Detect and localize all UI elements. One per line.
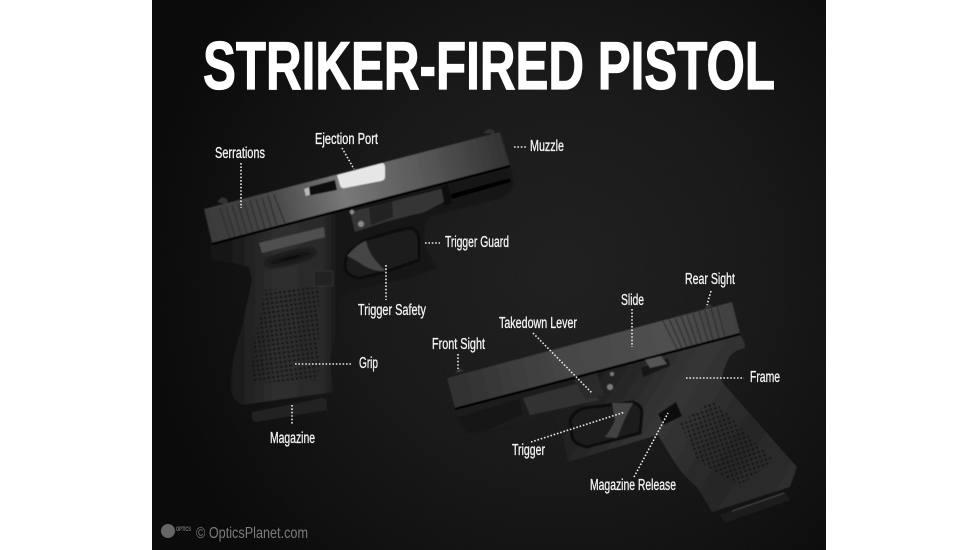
dust cover highlight (350, 188, 447, 232)
label: Trigger Guard: Trigger Guard (445, 234, 509, 251)
copyright text: © OpticsPlanet.com (196, 525, 308, 542)
guard opening (570, 402, 642, 447)
recoil spring shadow (441, 185, 452, 206)
label: Slide (621, 292, 644, 347)
label: Trigger Safety (358, 265, 426, 319)
logo wordmark: OPTICS (176, 527, 191, 533)
front sight (483, 129, 495, 134)
magazine catch (314, 271, 333, 286)
title: STRIKER-FIRED PISTOL (203, 28, 775, 104)
label: Magazine Release: Magazine Release (590, 477, 676, 494)
rail slots (451, 178, 511, 199)
slide lower edge (212, 166, 510, 244)
slide (204, 132, 510, 243)
magazine highlight (732, 493, 784, 511)
pistol: lower, facing left (447, 302, 797, 523)
footer: logo and copyright (161, 524, 308, 542)
frame light panel (259, 227, 325, 253)
label: Serrations: Serrations (215, 145, 265, 162)
label: Ejection Port: Ejection Port (315, 131, 378, 148)
slide stop tab (645, 356, 667, 368)
label: Takedown Lever (499, 315, 592, 393)
trigger (605, 403, 633, 438)
rail section (457, 399, 523, 433)
label: Serrations (215, 145, 265, 208)
slide stop lever (641, 358, 670, 377)
ejection port (337, 163, 385, 188)
trigger guard opening (345, 228, 419, 278)
label: Grip (295, 355, 378, 372)
frame pins (607, 372, 614, 390)
breech highlight (304, 187, 310, 196)
label: Frame: Frame (750, 369, 780, 386)
serrations (220, 195, 285, 238)
grip texture (252, 287, 319, 383)
label: Muzzle (514, 138, 564, 155)
slide lower edge (455, 334, 740, 409)
label: Trigger (512, 412, 625, 459)
magazine base (252, 398, 327, 422)
label: Trigger Guard (425, 234, 509, 251)
frame and grip (210, 167, 514, 405)
rear sight (217, 197, 228, 205)
thumb rest (264, 247, 316, 269)
pistol: upper, facing right (204, 129, 514, 422)
label: Trigger Safety: Trigger Safety (358, 302, 426, 319)
label: Muzzle: Muzzle (530, 138, 564, 155)
slide (447, 302, 740, 408)
magazine base (720, 492, 790, 523)
magazine release (658, 402, 682, 425)
breech opening (305, 180, 337, 196)
label: Magazine Release (590, 413, 676, 494)
label: Frame (686, 369, 780, 386)
label: Trigger: Trigger (512, 442, 545, 459)
trigger (347, 241, 386, 271)
takedown lever (369, 201, 393, 225)
label: Front Sight (432, 336, 485, 369)
dark background panel (152, 0, 826, 550)
grip texture (680, 400, 773, 487)
label: Magazine (270, 405, 315, 447)
front sight (455, 368, 464, 373)
label: Slide: Slide (621, 292, 644, 309)
label: Magazine: Magazine (270, 430, 315, 447)
label: Ejection Port (315, 131, 378, 169)
frame pins (350, 210, 364, 227)
dust cover highlight (523, 383, 600, 415)
rear sight (704, 304, 712, 309)
icon: logo globe (161, 524, 175, 538)
label: Rear Sight (685, 271, 735, 305)
label: Rear Sight: Rear Sight (685, 271, 735, 288)
label: Takedown Lever: Takedown Lever (499, 315, 577, 332)
frame and grip (455, 335, 797, 512)
label: Front Sight: Front Sight (432, 336, 485, 353)
serrations (663, 306, 725, 349)
rail section (444, 168, 514, 211)
label: Grip: Grip (359, 355, 378, 372)
takedown lever (574, 373, 604, 400)
